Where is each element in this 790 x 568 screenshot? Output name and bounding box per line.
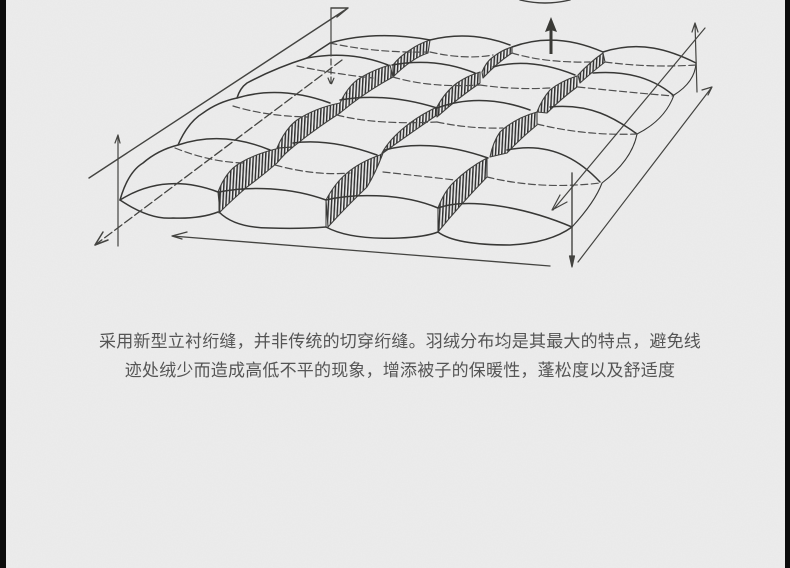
arrow: right inner diagonal xyxy=(552,28,705,210)
front row of pillows xyxy=(120,184,572,245)
arrow: top-left long diagonal xyxy=(89,8,348,178)
arrow: left vertical xyxy=(115,135,120,246)
arrow: right outer diagonal xyxy=(578,87,712,262)
seam 2 bands xyxy=(326,47,512,227)
seam 3 bands xyxy=(438,53,605,232)
left dark edge xyxy=(0,0,6,568)
dashed inner seam lines xyxy=(175,43,696,185)
left outer edge xyxy=(120,43,330,200)
text block: description xyxy=(99,332,701,380)
right dark edge xyxy=(785,0,790,568)
arrow: right front vertical xyxy=(571,173,573,266)
pillow outlines xyxy=(120,36,696,245)
back row curves, column 3 xyxy=(385,40,603,158)
text line 1: 采用新型立衬绗缝，并非传统的切穿绗缝。羽绒分布均是其最大的特点，避免线 xyxy=(99,332,701,351)
dimension arrows xyxy=(89,8,712,267)
diagram: quilted baffle-box construction xyxy=(88,0,713,268)
hatched seam walls xyxy=(218,40,605,232)
seam 1 bands xyxy=(218,40,430,212)
arrow: right vertical xyxy=(692,23,698,92)
arrow: bottom horizontal xyxy=(172,232,550,266)
arrow: dashed front-left diagonal xyxy=(95,60,342,245)
right outer edge xyxy=(572,63,696,227)
arrowhead: right front vertical xyxy=(570,256,574,267)
arrow: dashed vertical down xyxy=(328,50,334,85)
arrowhead: front-left diagonal xyxy=(95,232,108,245)
icon: bold up arrow xyxy=(545,17,557,54)
top arc fragment xyxy=(520,0,570,3)
text line 2: 迹处绒少而造成高低不平的现象，增添被子的保暖性，蓬松度以及舒适度 xyxy=(125,361,675,380)
back row curves, column 2 xyxy=(293,36,510,155)
back row curves, column 4 xyxy=(507,47,696,182)
back row curves, column 1 xyxy=(178,36,430,150)
arrow: small vertical, top xyxy=(330,8,332,50)
